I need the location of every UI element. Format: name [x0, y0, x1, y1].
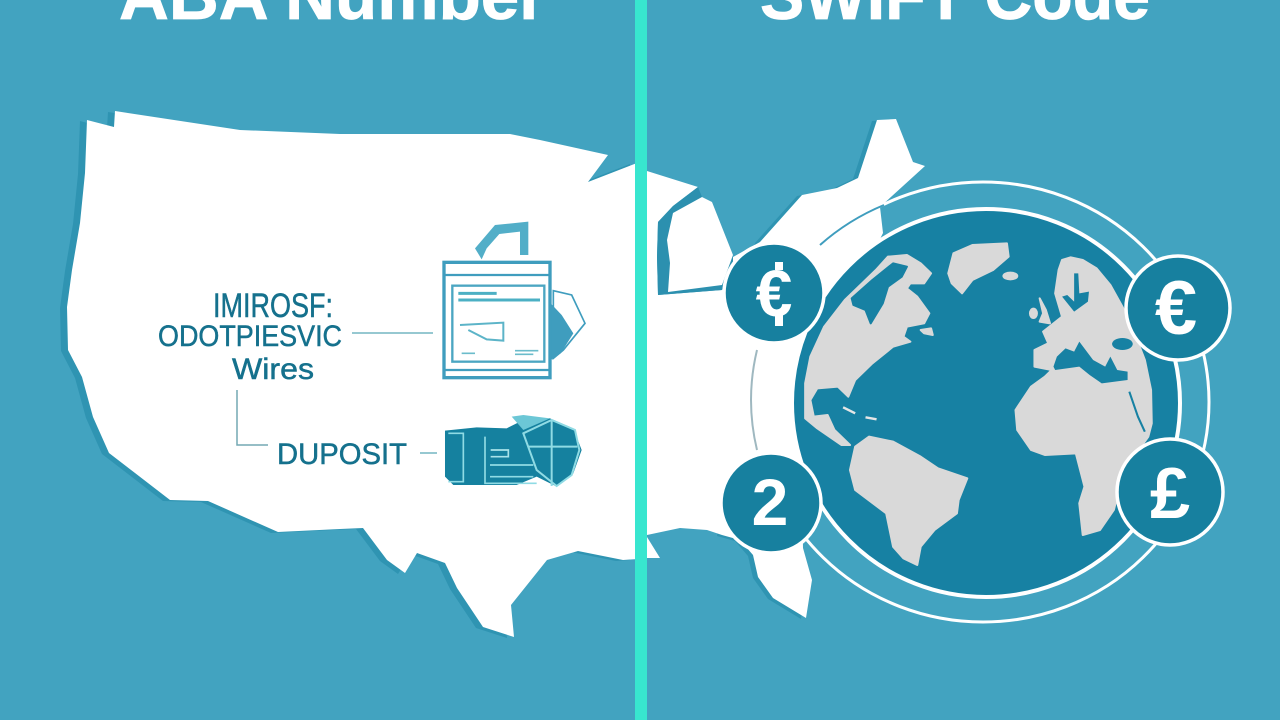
badge: euro top left: €: [756, 256, 792, 330]
map: United States east half: [647, 119, 925, 619]
badge: pound bottom right: £: [1150, 454, 1190, 534]
divider: vertical teal bar: [635, 0, 647, 720]
label: Duposit: DUPOSIT: [277, 438, 407, 471]
globe: [792, 209, 1180, 597]
map: United States silhouette: [60, 111, 637, 638]
panel: ABA number (left): [60, 0, 637, 638]
badge: number 2 bottom left: 2: [752, 465, 788, 539]
label: Imirosf: IMIROSF:: [213, 287, 333, 325]
panel: SWIFT code (right): [647, 0, 1230, 622]
icon: wire terminal with arrow: [444, 222, 585, 378]
icon: deposit case with shield: [445, 415, 582, 487]
badge: number 2 bottom left: [721, 453, 821, 553]
connector: wires label to terminal icon: [352, 332, 433, 334]
label: Odotpiesvic: ODOTPIESVIC: [158, 320, 342, 353]
badge: euro top left: [724, 243, 824, 343]
ring: outer orbit: [751, 182, 1209, 622]
badge: euro top right: [1126, 256, 1230, 360]
continents: [805, 243, 1152, 565]
label: Wires: Wires: [232, 353, 314, 386]
connector: deposit label to case icon: [420, 452, 437, 454]
badge: pound bottom right: [1117, 439, 1223, 545]
badge: euro top right: €: [1155, 266, 1197, 351]
connector: wires label to deposit label: [237, 390, 268, 445]
